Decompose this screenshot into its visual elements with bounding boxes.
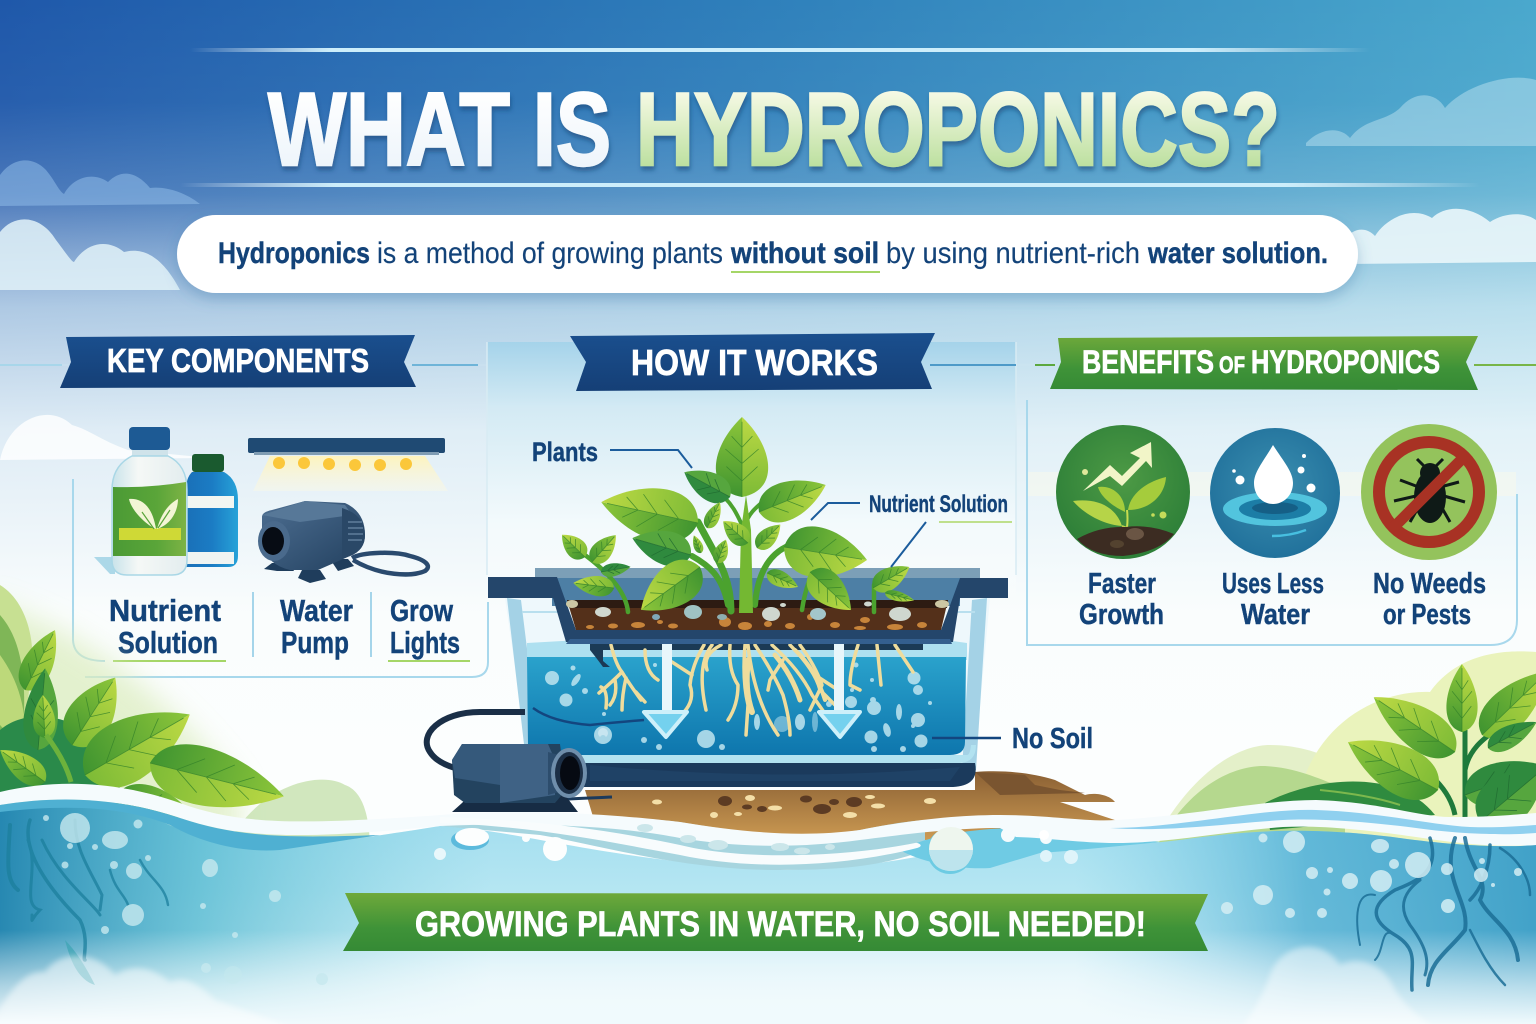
callout: no soil: No Soil [1012,723,1093,755]
definition pill [177,215,1358,293]
wave bands [0,784,1536,870]
top divider line [190,48,1370,52]
definition pill: Hydroponics [218,237,370,270]
labels: benefits [1079,568,1486,631]
underwater roots right [1357,838,1530,990]
callout: nutrient solution [811,491,1012,567]
foliage: bottom right [1265,657,1536,841]
labels: benefits: Growth [1079,599,1164,631]
title: HYDROPONICS? [636,72,1280,188]
bottom-right background hills [1150,651,1536,850]
large bottle [112,427,187,575]
water reservoir [525,657,976,787]
labels: key components: Lights [390,625,460,660]
definition pill: by using nutrient-rich [886,237,1140,270]
callout: plants [532,437,692,468]
labels: key components: Grow [390,593,454,628]
plants [555,417,915,627]
labels: benefits: Uses Less [1222,568,1324,600]
arrows down into water [533,643,860,737]
how it works panel background [487,342,1016,602]
icon: faster growth [1056,425,1190,559]
definition pill: without soil [730,237,879,270]
labels: key components [109,593,470,662]
labels: key components: Nutrient [109,593,221,628]
banner: how it works: HOW IT WORKS [631,342,878,383]
labels: benefits: No Weeds [1373,568,1486,600]
bottom banner: GROWING PLANTS IN WATER, NO SOIL NEEDED! [415,905,1146,944]
pebbles in growing medium [566,600,949,630]
bottom-left background hills [0,600,370,850]
icon: nutrient bottles [94,427,238,575]
pump and hose [427,712,612,812]
definition pill: water solution. [1147,237,1328,270]
underwater roots left [8,820,168,985]
icon: grow light [248,438,448,491]
labels: benefits: or Pests [1383,599,1471,631]
banner: benefits [1050,336,1478,390]
foliage: bottom left [0,585,291,892]
banner: benefits: OF [1219,352,1245,379]
icon: no weeds or pests [1361,424,1497,560]
banner: key components: KEY COMPONENTS [107,342,369,379]
title: WHAT IS [268,72,611,188]
banner: benefits: BENEFITS [1082,344,1214,380]
banner: how it works [570,333,935,391]
clouds [0,78,1536,460]
underwater bubbles left [43,813,328,985]
definition pill: is a method of growing plants [377,237,723,270]
bottom banner [343,893,1208,951]
banner: key components [60,335,416,388]
icon: water pump [258,501,428,583]
grow tray [488,568,1008,644]
labels: key components: Water [280,593,353,628]
banner: benefits: HYDROPONICS [1251,344,1440,380]
labels: key components: Pump [281,625,349,660]
bottom clouds [0,947,1440,1024]
callout: plants: Plants [532,437,598,467]
roots [599,645,913,735]
connector lines [0,364,1536,366]
water below the band [0,803,1536,1024]
labels: key components: Solution [118,625,218,660]
icon: uses less water [1210,428,1340,558]
title [268,72,1280,188]
bubbles in reservoir [545,662,932,752]
small blue bottle [186,454,238,567]
bubbles on the water surface [434,824,1078,874]
callout: nutrient solution: Nutrient Solution [869,491,1008,518]
panel: benefits frame [1027,400,1517,645]
labels: benefits: Faster [1088,568,1156,600]
labels: benefits: Water [1241,599,1310,631]
ground soil [585,771,1130,840]
tank glass [505,598,990,772]
lower divider line [180,183,1480,187]
panel: key components frame [73,479,488,677]
tray underside shade [590,642,923,667]
underwater bubbles right [1221,831,1522,918]
